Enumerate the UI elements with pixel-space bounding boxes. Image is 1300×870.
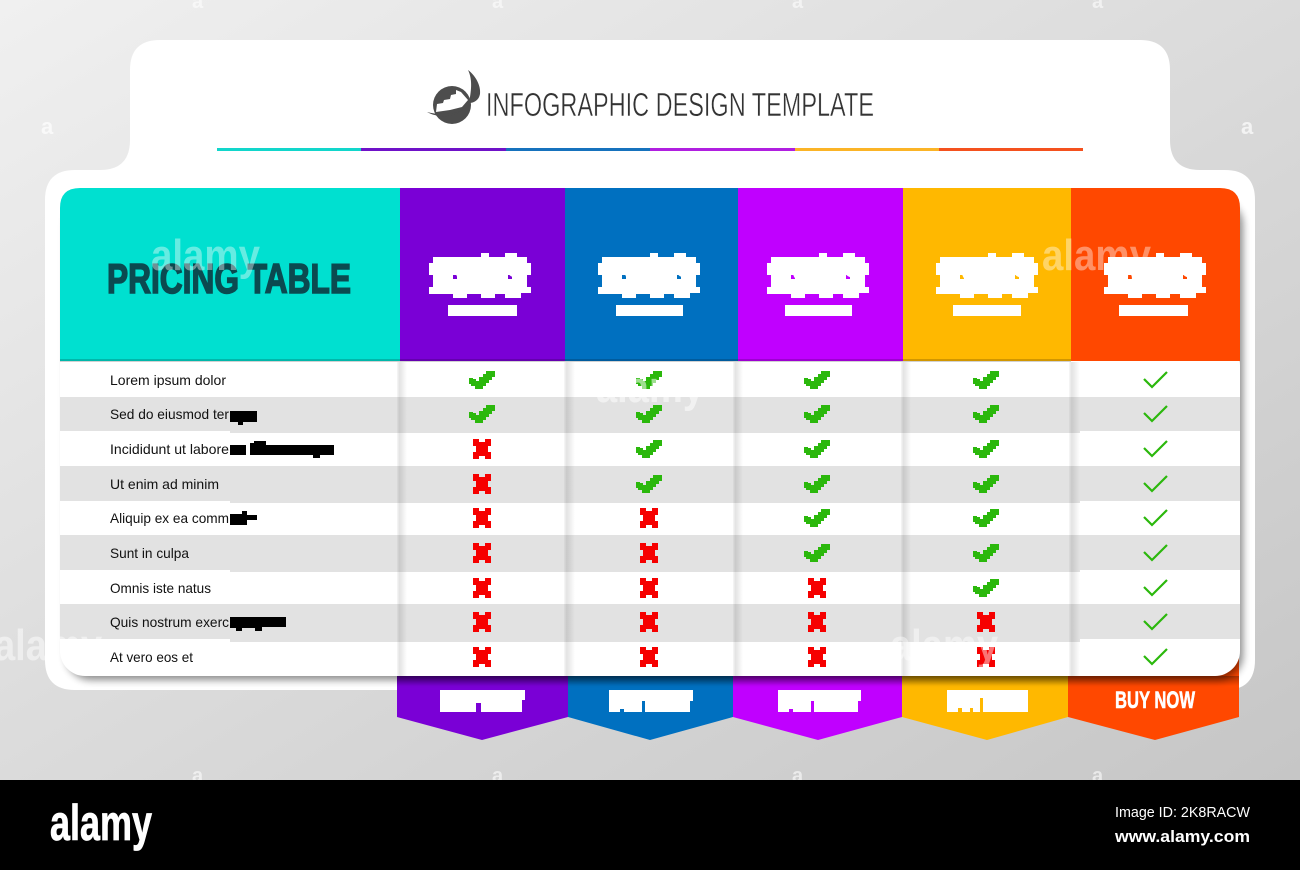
button: plan 3 — [733, 660, 902, 740]
alamy logo: alamy — [50, 795, 152, 851]
price cell: plan 4: 69.0$ — [940, 255, 1033, 299]
black credit bar — [0, 780, 1300, 870]
marks: plan 4 — [973, 371, 999, 667]
table shadow — [66, 200, 1243, 680]
header: logo and title — [427, 70, 874, 124]
button: plan 2 — [568, 660, 733, 740]
price cell: plan 3: 59.0$ — [771, 255, 864, 299]
price cell: plan 1 — [400, 188, 565, 361]
feature labels: Lorem ipsum dolor — [110, 372, 226, 388]
website: www.alamy.com — [1114, 827, 1250, 846]
colored title underline — [217, 148, 1083, 151]
feature labels — [110, 372, 334, 665]
title: INFOGRAPHIC DESIGN TEMPLATE — [486, 86, 874, 123]
buy buttons — [397, 640, 1239, 740]
heading cell: pricing table — [60, 188, 400, 361]
price cell: plan 3 — [738, 188, 903, 361]
stock watermarks: alamy — [151, 231, 260, 280]
feature labels: Ut enim ad minim — [110, 476, 219, 492]
white backing panel — [45, 40, 1255, 690]
stock watermarks: alamy — [890, 621, 998, 670]
button: plan 4 — [902, 660, 1068, 740]
stock watermarks: a — [1092, 765, 1104, 787]
stock watermarks: a — [492, 765, 504, 787]
feature labels: Incididunt ut labore — [110, 441, 229, 457]
button: plan 1 — [397, 660, 568, 740]
price cell: plan 1: 29.0$ — [434, 255, 527, 299]
price cell: plan 2 — [565, 188, 738, 361]
marks: plan 1 — [469, 371, 495, 667]
marks: plan 3 — [804, 371, 830, 667]
stock watermarks: a — [41, 114, 54, 139]
marks: plan 5 — [1144, 372, 1167, 664]
stock watermarks: a — [792, 765, 804, 787]
price cell: plan 5 — [1071, 188, 1240, 361]
button: buy now: BUY NOW — [1115, 687, 1195, 714]
feature labels: Omnis iste natus — [110, 580, 211, 596]
header row — [60, 188, 1240, 362]
price cell: plan 4 — [903, 188, 1071, 361]
stock watermarks: a — [192, 765, 204, 787]
feature labels: At vero eos et — [110, 649, 193, 665]
feature labels: Quis nostrum exerc — [110, 614, 229, 630]
heading cell: pricing table: PRICING TABLE — [107, 255, 351, 302]
marks: plan 2 — [636, 371, 662, 667]
price cell: plan 2: 39.0$ — [603, 255, 696, 299]
stock watermarks: alamy — [596, 363, 704, 412]
image id: Image ID: 2K8RACW — [1115, 804, 1251, 821]
price cell: plan 5: 99.0$ — [1109, 255, 1201, 299]
feature labels: Sed do eiusmod ter — [110, 406, 229, 422]
feature labels: Aliquip ex ea comm — [110, 510, 229, 526]
icon: logo — [427, 70, 480, 124]
feature labels: Sunt in culpa — [110, 545, 189, 561]
stock watermarks: alamy — [1042, 231, 1151, 280]
stock watermarks: a — [1241, 114, 1254, 139]
table body with rows — [60, 340, 1240, 676]
button: buy now — [1068, 640, 1239, 740]
